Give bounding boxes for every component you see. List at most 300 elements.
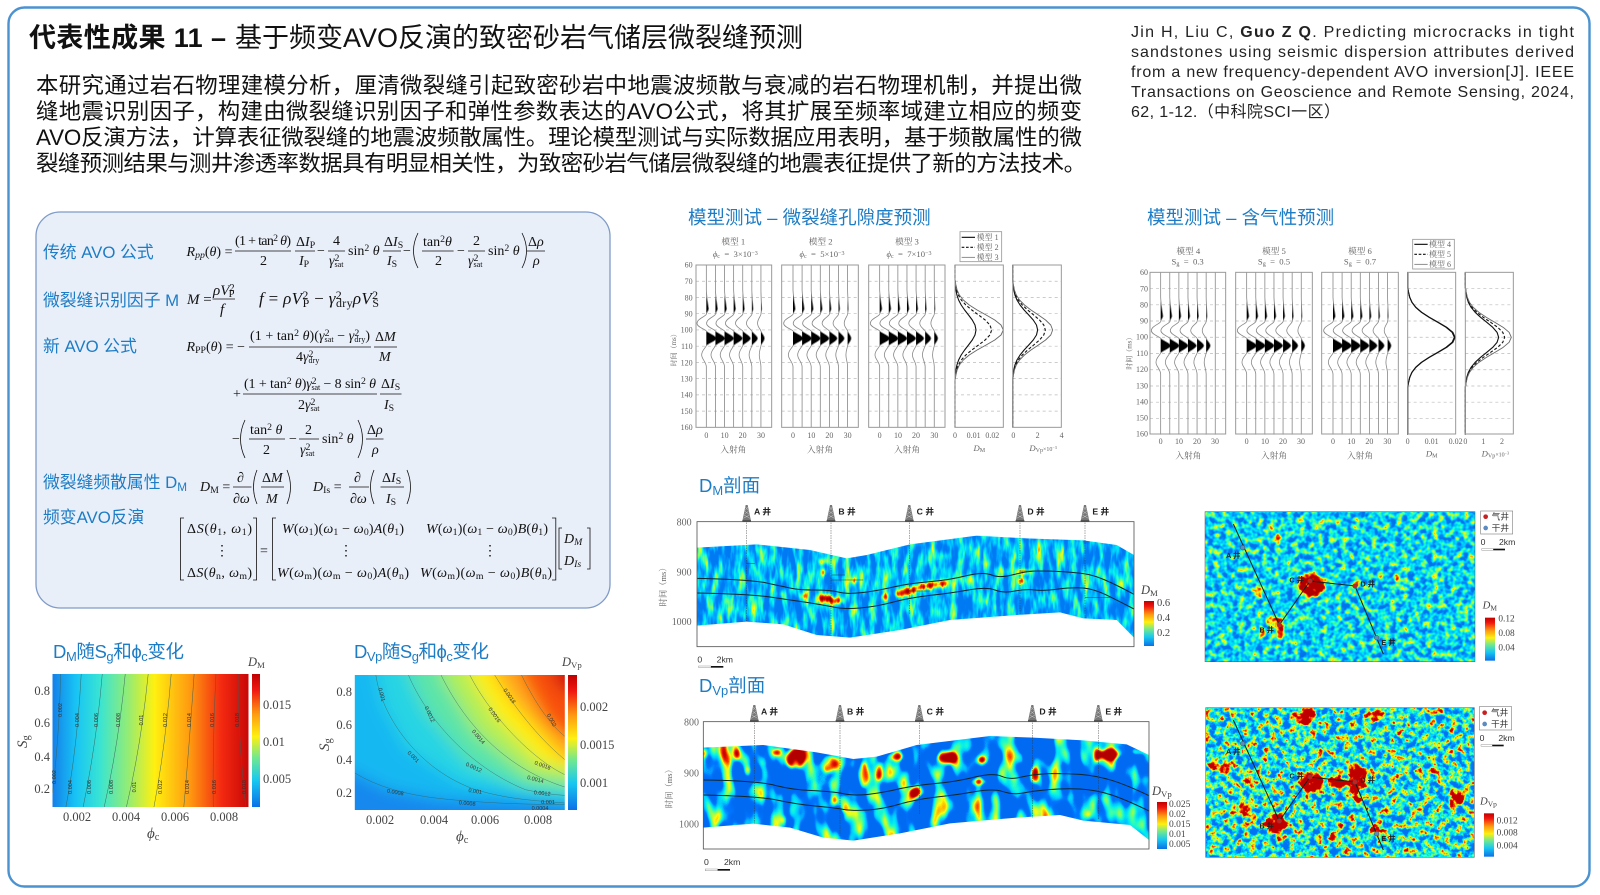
title: 基于频变AVO反演的致密砂岩气储层微裂缝预测 (235, 23, 803, 53)
formula: conventional AVO (186, 233, 545, 270)
DVp section colorbar: 0.015 (1169, 820, 1191, 830)
formula: new AVO: − (232, 432, 240, 447)
citation: Jin H, Liu C, Guo Z Q. Predicting microcracks in tight (1131, 24, 1575, 41)
frame (697, 522, 1134, 647)
citation: Transactions on Geoscience and Remote Sensing, 2024, (1131, 84, 1574, 101)
legend: 干井 (1492, 522, 1509, 533)
wells: E 井 (1092, 505, 1110, 516)
x ticks: 10 (721, 431, 729, 440)
formula: new AVO: 2γ2sat (298, 397, 320, 413)
axis ticks: 0.002 (63, 810, 91, 824)
model titles: 模型 1 (721, 235, 745, 246)
axis labels: 90 (685, 309, 693, 318)
formula: inversion matrix: = (260, 544, 268, 559)
title: 代表性成果 11 – (29, 23, 226, 53)
colorbar (568, 675, 577, 810)
axis ticks: 0.2 (336, 786, 352, 800)
contour labels: 0.0012 (423, 706, 435, 723)
contour labels: 0.012 (163, 713, 169, 727)
formula: conventional AVO: 2 (435, 254, 442, 269)
axis ticks: 0.004 (112, 810, 141, 824)
heading: DVp section: DVp剖面 (699, 675, 765, 698)
DM curves: 0.02 (985, 431, 999, 440)
contour labels: 0.016 (212, 780, 218, 794)
scale bar: 2km (1498, 733, 1515, 743)
formula: new AVO: γ2sat (300, 442, 315, 458)
wells: C 井 (927, 705, 944, 716)
legend (1481, 511, 1513, 534)
map field (1205, 512, 1475, 662)
x ticks: 10 (1261, 437, 1269, 446)
formula: conventional AVO: − (403, 244, 411, 259)
DM section colorbar: DM (1140, 583, 1158, 598)
x ticks: 30 (1297, 437, 1305, 446)
formula: factor M: M = (186, 292, 212, 308)
formula: new AVO: tan2 θ (250, 422, 283, 438)
DVp curves: 0 (1011, 431, 1015, 440)
chart: model tests gas (1124, 239, 1513, 460)
DVp curves (1463, 272, 1513, 460)
formula: inversion matrix: DM (563, 532, 583, 548)
axis labels (669, 261, 693, 432)
colorbar ticks: 0.002 (580, 700, 608, 714)
axis labels: 120 (681, 358, 693, 367)
axis labels: 160 (681, 423, 693, 432)
wells: A 井 (754, 505, 771, 516)
colorbar labels: 0.08 (1498, 629, 1515, 639)
x ticks (1159, 437, 1391, 460)
gathers (696, 265, 945, 427)
formula: conventional AVO: sin2 θ (488, 243, 520, 259)
axis ticks: 0.008 (524, 813, 552, 827)
x ticks: 10 (1347, 437, 1355, 446)
contour labels: 0.001 (541, 800, 555, 806)
x ticks: 30 (844, 431, 852, 440)
heading: model test porosity: 模型测试 – 微裂缝孔隙度预测 (688, 207, 931, 228)
DM section colorbar (1140, 583, 1171, 646)
colorbar labels: 0.12 (1498, 615, 1515, 625)
DVp section colorbar: 0.025 (1169, 800, 1191, 810)
wells (742, 505, 1110, 637)
x ticks: 入射角 (1347, 449, 1373, 460)
heading: DM section: DM剖面 (699, 475, 760, 498)
label: microcrack factor M: 微裂缝识别因子 M (43, 291, 179, 310)
formula: new AVO: Δρ (367, 423, 383, 438)
citation (1131, 24, 1575, 121)
model titles (1172, 245, 1377, 268)
x ticks: 30 (1211, 437, 1219, 446)
legend: 模型 3 (977, 252, 999, 262)
DVp curves: DVp×10−3 (1028, 443, 1057, 454)
scale bar: 2km (724, 857, 740, 867)
formula: new AVO: 2 (305, 423, 312, 438)
axis ticks (15, 684, 238, 843)
model titles: 模型 4 (1176, 245, 1201, 256)
legend: 气井 (1491, 707, 1509, 718)
x ticks: 入射角 (807, 443, 833, 454)
citation: 62, 1-12.（中科院SCI一区） (1131, 103, 1340, 121)
axis labels: 110 (681, 342, 693, 351)
DM curves: DM (973, 443, 986, 454)
well labels: A 井 (1226, 747, 1240, 756)
well labels: A 井 (1226, 551, 1240, 560)
wells: C 井 (917, 505, 934, 516)
formula: factor M: f = ρV2P − γ2dryρV2S (259, 288, 379, 310)
y axis: 时间（ms） (664, 765, 674, 808)
wells: B 井 (838, 505, 856, 516)
well labels (1226, 747, 1396, 843)
colorbar (1485, 618, 1495, 661)
axis labels: 110 (1136, 349, 1148, 358)
axis labels: 60 (1140, 268, 1148, 277)
chart: DVp seismic section (664, 705, 1150, 871)
formula: new AVO: 2 (263, 443, 270, 458)
legend (1413, 239, 1454, 269)
DM curves (953, 265, 1004, 454)
well markers (1240, 545, 1379, 640)
axis ticks: 0.008 (210, 810, 238, 824)
x ticks: 10 (1175, 437, 1183, 446)
colorbar ticks: 0.005 (263, 772, 291, 786)
formula: new AVO: (1 + tan2 θ)(γ2sat − γ2dry) (250, 328, 370, 344)
scale bar (1481, 537, 1515, 550)
x ticks: 20 (1193, 437, 1201, 446)
well labels: B 井 (1259, 821, 1274, 830)
axis labels: 160 (1136, 430, 1148, 439)
summary paragraph: AVO反演方法，计算表征微裂缝的地震波频散属性。理论模型测试与实际数据应用表明，基于频散属性的微 (36, 125, 1082, 150)
colorbar ticks: 0.015 (263, 698, 291, 712)
axis ticks: Sg (317, 738, 334, 751)
legend: 干井 (1491, 718, 1509, 729)
x ticks: 30 (1383, 437, 1391, 446)
axis ticks: 0.006 (161, 810, 189, 824)
well labels: D 井 (1360, 776, 1375, 785)
scale bar (1480, 733, 1515, 746)
contour labels: 0.002 (545, 713, 557, 728)
y axis: 800 (684, 718, 699, 729)
contour labels: 0.006 (87, 780, 93, 794)
formula: factor M: ρV2P (212, 283, 235, 300)
formula: conventional AVO: ΔIS (384, 235, 403, 251)
formula: conventional AVO: − (317, 244, 325, 259)
contour labels: 0.0008 (386, 789, 404, 797)
formula: dispersion attributes: ∂ω (350, 492, 367, 507)
y axis (658, 518, 692, 628)
formula: new AVO: RPP(θ) = − (186, 340, 245, 356)
x ticks: 入射角 (1175, 449, 1201, 460)
axis labels: 140 (681, 391, 693, 400)
formula: dispersion attributes: M (265, 492, 279, 507)
formula: conventional AVO: Rpp(θ) = (186, 245, 233, 261)
well labels: D 井 (1360, 580, 1375, 589)
x ticks: 20 (1365, 437, 1373, 446)
model titles: Sg = 0.7 (1344, 257, 1377, 268)
DM section colorbar: 0.4 (1157, 613, 1171, 624)
formula: dispersion attributes: ΔIS (382, 471, 401, 487)
DVp section colorbar: DVp (1151, 784, 1172, 799)
contour labels: 0.008 (109, 780, 115, 794)
contour labels: 0.0012 (533, 790, 551, 798)
formula: conventional AVO: ρ (532, 254, 540, 269)
horizons (697, 571, 1134, 609)
formula: inversion matrix: W(ωm)(ωm − ω0)A(θn) (277, 566, 409, 582)
colorbar labels (1479, 796, 1518, 851)
formula: conventional AVO: Δρ (528, 235, 544, 250)
gathers (1150, 272, 1398, 435)
wells: E 井 (1105, 705, 1123, 716)
axis ticks: 0.4 (34, 750, 51, 764)
axis ticks: 0.8 (34, 684, 50, 698)
axis labels: 80 (685, 293, 693, 302)
formula: new AVO: 4γ2dry (296, 349, 320, 365)
DVp curves: 2 (1500, 437, 1504, 446)
well labels: E 井 (1381, 834, 1396, 843)
x ticks: 20 (739, 431, 747, 440)
label: dispersion attribute DM: 微裂缝频散属性 DM (43, 473, 187, 494)
x ticks: 10 (894, 431, 902, 440)
colorbar ticks: 0.001 (580, 776, 608, 790)
formula: new AVO: ΔM (375, 330, 397, 345)
formula: dispersion attributes: DIs = (312, 480, 342, 496)
axis ticks: 0.6 (34, 716, 50, 730)
horizons (703, 774, 1149, 811)
contour labels: 0.0012 (465, 762, 482, 774)
x ticks: 20 (912, 431, 920, 440)
contour labels: 0.016 (210, 713, 216, 727)
x ticks: 入射角 (1261, 449, 1287, 460)
DM curves: 0.01 (967, 431, 981, 440)
colorbar ticks (247, 655, 291, 786)
well markers (1240, 741, 1379, 836)
x ticks: 0 (1331, 437, 1335, 446)
formula: dispersion attributes: DM = (199, 480, 230, 496)
legend: 气井 (1492, 511, 1509, 522)
axis labels: 时间（ms） (1124, 334, 1133, 370)
axis ticks: Sg (15, 734, 32, 748)
formula: dispersion attributes (199, 470, 410, 508)
formula: conventional AVO: γ2sat (329, 253, 344, 269)
colorbar ticks: DM (247, 655, 265, 670)
map field (1206, 708, 1474, 857)
formula: inversion matrix: DIs (563, 554, 581, 570)
scale bar: 0 (697, 654, 702, 664)
DVp curves: 4 (1060, 431, 1064, 440)
axis labels: 140 (1136, 397, 1148, 406)
contour labels: 0.002 (58, 703, 64, 717)
model titles: 模型 6 (1348, 245, 1373, 256)
axis ticks: ϕc (456, 829, 469, 846)
formula: conventional AVO: 2 (473, 234, 480, 249)
DVp section colorbar: 0.01 (1169, 830, 1186, 840)
formula: dispersion attributes: ∂ω (233, 492, 250, 507)
DM curves (1406, 272, 1463, 460)
formula: inversion matrix: ΔS(θ1, ω1) (187, 522, 252, 538)
well lines (1233, 720, 1383, 850)
contour labels: 0.004 (75, 713, 81, 727)
formula: conventional AVO: 4 (333, 234, 340, 249)
wells: A 井 (761, 705, 778, 716)
contour labels: 0.012 (158, 780, 164, 794)
formula: dispersion attributes: ΔM (262, 471, 284, 486)
x ticks: 20 (1279, 437, 1287, 446)
wells: D 井 (1039, 705, 1057, 716)
model titles: 模型 5 (1262, 245, 1286, 256)
chart: DM seismic section (658, 505, 1134, 668)
axis labels: 90 (1140, 317, 1148, 326)
well labels (1226, 551, 1396, 647)
formula: dispersion attributes: ∂ (237, 471, 244, 486)
axis ticks: 0.2 (34, 782, 50, 796)
scale bar: 2km (1499, 537, 1515, 547)
scale bar (697, 654, 733, 668)
formula: factor M: f (220, 302, 226, 318)
contour labels: 0.001 (468, 788, 482, 796)
DVp section colorbar (1151, 784, 1191, 850)
formula: conventional AVO: IS (386, 254, 397, 270)
formula: new AVO: + (233, 387, 241, 402)
label: new AVO: 新 AVO 公式 (43, 337, 137, 356)
contour labels: 0.004 (68, 780, 74, 794)
chart: model tests porosity (669, 232, 1064, 454)
heatmap: DVp field (354, 675, 565, 810)
wells (750, 705, 1123, 837)
colorbar ticks: 0.0015 (580, 738, 614, 752)
contour labels (52, 703, 248, 794)
colorbar ticks (561, 655, 614, 790)
well labels: E 井 (1381, 638, 1396, 647)
legend: 模型 1 (977, 232, 999, 242)
DM curves: 0.02 (1449, 437, 1463, 446)
heading: DVp vs Sg and phi: DVp随Sg和ϕc变化 (354, 641, 489, 664)
formula: inversion matrix: ⋮ (483, 544, 497, 559)
frame (703, 722, 1149, 849)
summary paragraph: 本研究通过岩石物理建模分析，厘清微裂缝引起致密砂岩中地震波频散与衰减的岩石物理机制，并提出微 (36, 73, 1082, 98)
formula: conventional AVO: tan2θ (423, 234, 452, 250)
axis labels: 60 (685, 261, 693, 270)
DVp curves (1011, 265, 1064, 454)
axis labels: 70 (685, 277, 693, 286)
contour labels: 0.018 (242, 780, 248, 794)
scale bar: 0 (704, 857, 709, 867)
model titles: 模型 2 (809, 235, 833, 246)
colorbar ticks: 0.01 (263, 735, 285, 749)
DVp curves: 2 (1036, 431, 1040, 440)
axis labels: 70 (1140, 284, 1148, 293)
legend: 模型 4 (1429, 239, 1451, 249)
axis ticks: 0.002 (366, 813, 394, 827)
y axis: 900 (684, 769, 699, 780)
section field (697, 536, 1134, 638)
label: conventional AVO: 传统 AVO 公式 (43, 243, 154, 262)
DVp curves: 1 (1481, 437, 1485, 446)
contour labels: 0.0014 (470, 729, 485, 746)
panel: AVO formulas (36, 212, 610, 608)
DM curves: 0.01 (1425, 437, 1439, 446)
axis labels: 130 (1136, 381, 1148, 390)
DM curves: 0 (953, 431, 957, 440)
axis ticks (317, 685, 552, 846)
formula: new AVO: ρ (371, 443, 379, 458)
axis labels: 120 (1136, 365, 1148, 374)
axis ticks: 0.6 (336, 718, 352, 732)
formula: inversion matrix (180, 518, 590, 582)
well labels: C 井 (1289, 771, 1304, 780)
DVp section colorbar: 0.02 (1169, 810, 1186, 820)
axis labels: 100 (681, 326, 693, 335)
contour labels: 0.0016 (487, 707, 501, 724)
formula: new AVO: M (378, 350, 392, 365)
scale bar: 2km (717, 654, 733, 664)
well labels: C 井 (1289, 575, 1304, 584)
scale bar: 0 (1480, 733, 1485, 743)
section field (704, 736, 1149, 841)
axis ticks: 0.4 (336, 753, 353, 767)
formula: dispersion attributes: IS (385, 492, 396, 508)
colorbar labels (1482, 600, 1515, 654)
summary paragraph: 裂缝预测结果与测井渗透率数据具有明显相关性，为致密砂岩气储层微裂缝的地震表征提供了新的方法技术。 (36, 151, 1086, 176)
axis ticks: 0.8 (336, 685, 352, 699)
y axis (664, 718, 699, 831)
formula: conventional AVO: (1 + tan2 θ) (235, 233, 291, 249)
contour labels: 0.001 (406, 750, 420, 764)
model titles (713, 235, 932, 260)
formula: new AVO: (1 + tan2 θ)γ2sat − 8 sin2 θ (244, 376, 376, 392)
x ticks: 10 (807, 431, 815, 440)
y axis: 900 (677, 568, 692, 579)
colorbar (1484, 813, 1494, 857)
DVp curves: 0 (1463, 437, 1467, 446)
chart: DVp contour (288, 630, 633, 863)
contour labels: 0.01 (132, 782, 138, 792)
formula: conventional AVO: γ2sat (468, 253, 483, 269)
x ticks: 入射角 (894, 443, 920, 454)
contour labels: 0.008 (116, 713, 122, 727)
legend: 模型 2 (977, 242, 999, 252)
summary paragraph: 缝地震识别因子，构建由微裂缝识别因子和弹性参数表达的AVO公式，将其扩展至频率域建立相应的频变 (36, 99, 1082, 124)
citation: from a new frequency-dependent AVO inversion[J]. IEEE (1131, 64, 1574, 81)
formula: new AVO (186, 328, 402, 458)
wells: D 井 (1027, 505, 1045, 516)
formula: dispersion attributes: ∂ (354, 471, 361, 486)
model titles: ϕc = 3×10−3 (713, 249, 758, 260)
axis ticks: 0.006 (471, 813, 499, 827)
formula: factor M (186, 283, 379, 318)
contour labels: 0.01 (139, 715, 145, 725)
x ticks: 0 (791, 431, 795, 440)
formula: new AVO: − (289, 432, 297, 447)
citation: sandstones using seismic dispersion attributes derived (1131, 44, 1574, 61)
formula: new AVO: ΔIS (381, 377, 400, 393)
model titles: Sg = 0.3 (1172, 257, 1204, 268)
formula: inversion matrix: ⋮ (215, 544, 229, 559)
axis ticks: 0.004 (420, 813, 449, 827)
x ticks: 0 (878, 431, 882, 440)
axis labels: 130 (681, 374, 693, 383)
x ticks: 30 (757, 431, 765, 440)
axis ticks: ϕc (147, 826, 160, 843)
colorbar labels: DVp (1479, 796, 1497, 808)
contour labels: 0.002 (52, 770, 58, 784)
colorbar labels: 0.04 (1498, 644, 1515, 654)
label: frequency AVO inversion: 频变AVO反演 (43, 508, 144, 527)
model titles: 模型 3 (895, 235, 919, 246)
contour labels: 0.0014 (526, 775, 544, 785)
y axis: 800 (677, 518, 692, 529)
formula: inversion matrix: W(ω1)(ω1 − ω0)A(θ1) (282, 522, 404, 538)
contour labels: 0.001 (376, 687, 386, 702)
well lines (1233, 524, 1383, 654)
DVp section colorbar: 0.005 (1169, 840, 1191, 850)
